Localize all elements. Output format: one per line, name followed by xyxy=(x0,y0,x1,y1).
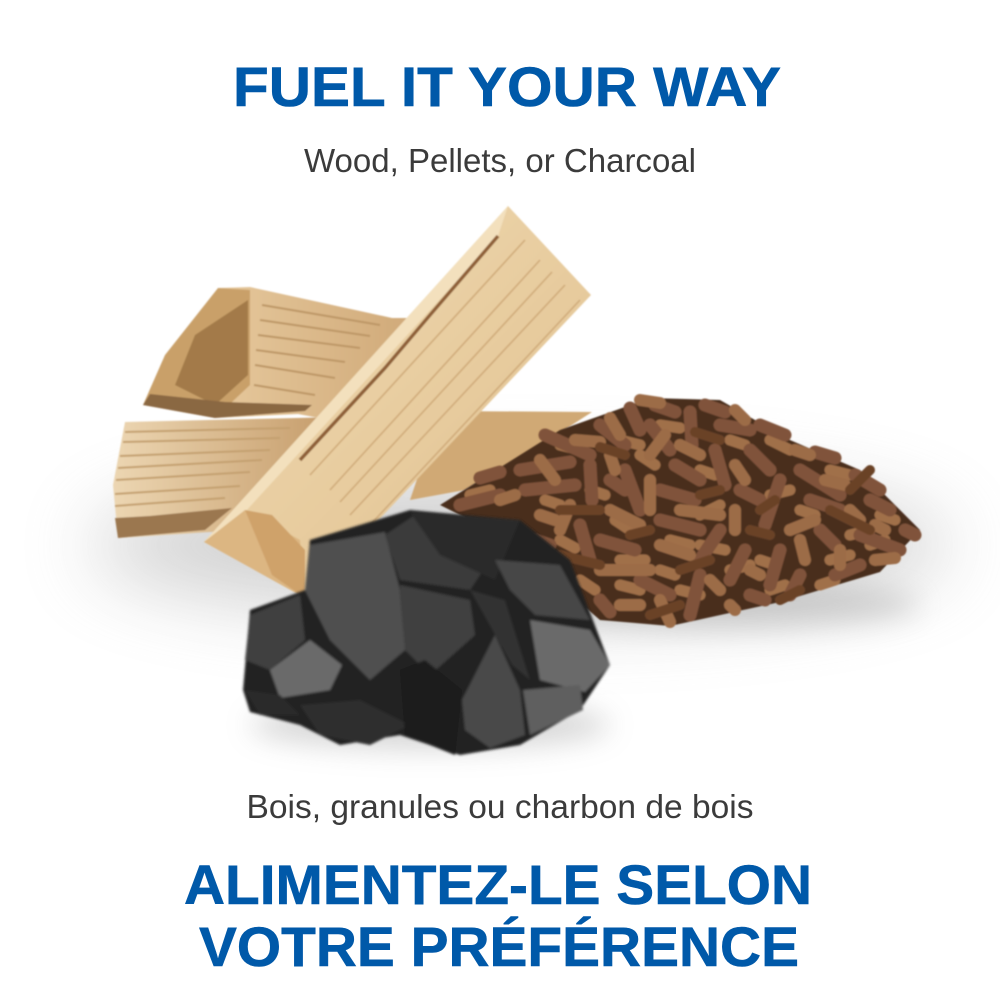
lower log xyxy=(113,417,340,538)
upper log xyxy=(143,287,420,420)
pellets: dark tone xyxy=(560,432,870,615)
title: French: VOTRE PRÉFÉRENCE xyxy=(199,915,799,978)
ground shadow xyxy=(90,473,950,749)
pellets: mid tone xyxy=(460,405,915,615)
title: French: ALIMENTEZ-LE SELON xyxy=(184,853,812,916)
charcoal pile xyxy=(243,510,610,755)
title: French xyxy=(184,853,812,978)
large split plank xyxy=(204,206,591,598)
wood pellet pile xyxy=(440,398,920,626)
subtitle: French: Bois, granules ou charbon de bois xyxy=(246,788,754,825)
back log right section xyxy=(410,411,592,500)
pellets: light tone xyxy=(500,400,895,622)
firewood logs xyxy=(113,206,592,598)
subtitle: English: Wood, Pellets, or Charcoal xyxy=(304,142,696,179)
pellets: fill layer xyxy=(470,425,895,595)
title: English: FUEL IT YOUR WAY xyxy=(233,55,781,118)
product photo: wood, pellets and charcoal xyxy=(90,206,950,755)
